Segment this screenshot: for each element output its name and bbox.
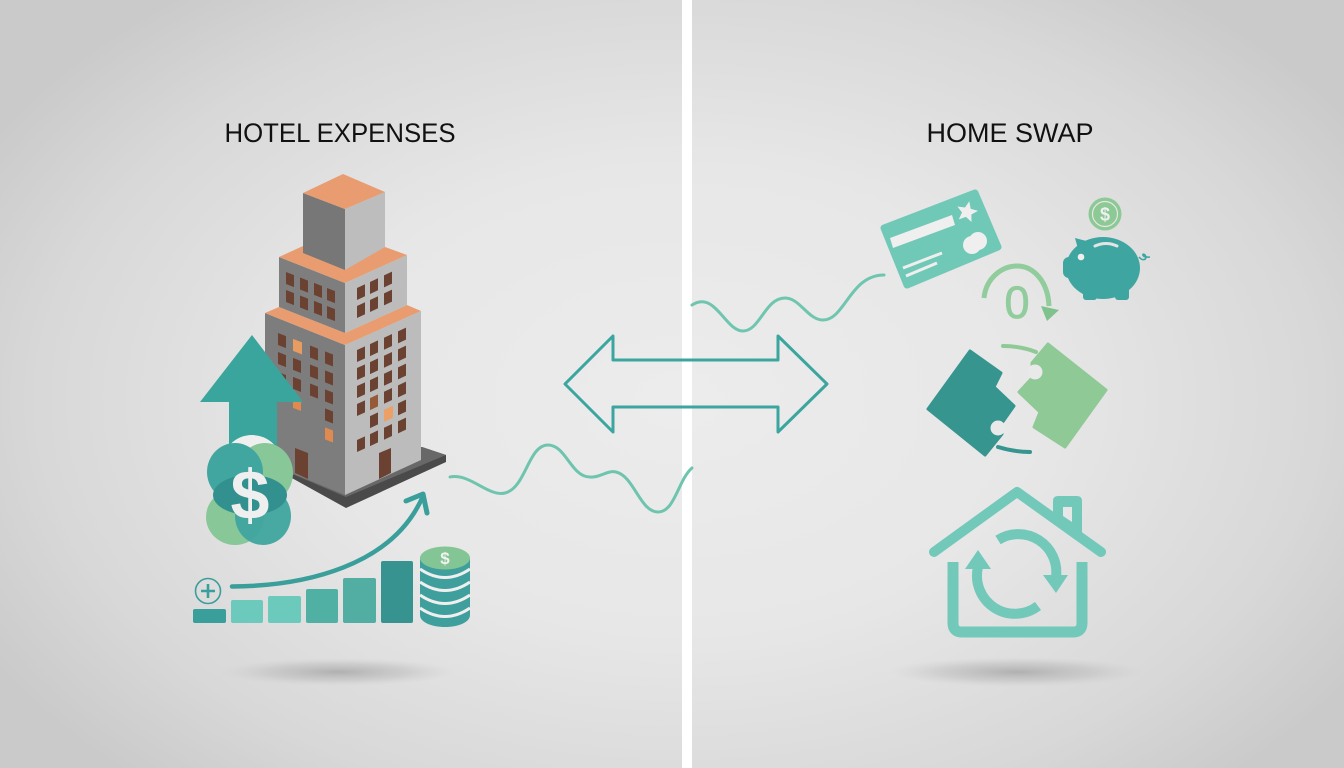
icon: up arrow	[200, 335, 303, 445]
icon: coin stack	[420, 546, 470, 627]
ground shadow: left	[220, 658, 456, 686]
title: home swap: HOME SWAP	[926, 118, 1094, 148]
icon: zero fee circular arrow	[984, 266, 1059, 328]
icon: green puzzle piece	[1003, 344, 1106, 447]
icon: zero fee circular arrow: 0	[1004, 277, 1030, 328]
title: hotel expenses: HOTEL EXPENSES	[224, 118, 456, 148]
growth arrow	[232, 494, 427, 586]
wavy connector: left	[450, 445, 692, 512]
icon: dollar coin above piggy bank: $	[1100, 204, 1110, 224]
wavy connector: right	[692, 275, 884, 331]
ground shadow: right	[889, 657, 1145, 687]
icon: credit card	[884, 193, 998, 285]
icon: dollar coins	[206, 435, 293, 545]
icon: dollar coin above piggy bank	[1088, 198, 1122, 230]
icon: dollar coins: $	[231, 456, 269, 534]
icon: teal puzzle piece	[928, 351, 1030, 455]
bar chart	[193, 561, 413, 623]
double-headed arrow	[565, 336, 827, 432]
centre divider	[682, 0, 692, 768]
icon: plus circle	[196, 578, 220, 604]
icon: coin stack: $	[440, 549, 450, 568]
icon: house with swap arrows	[934, 492, 1101, 632]
icon: piggy bank	[1063, 237, 1150, 300]
icon: hotel building	[265, 174, 446, 508]
